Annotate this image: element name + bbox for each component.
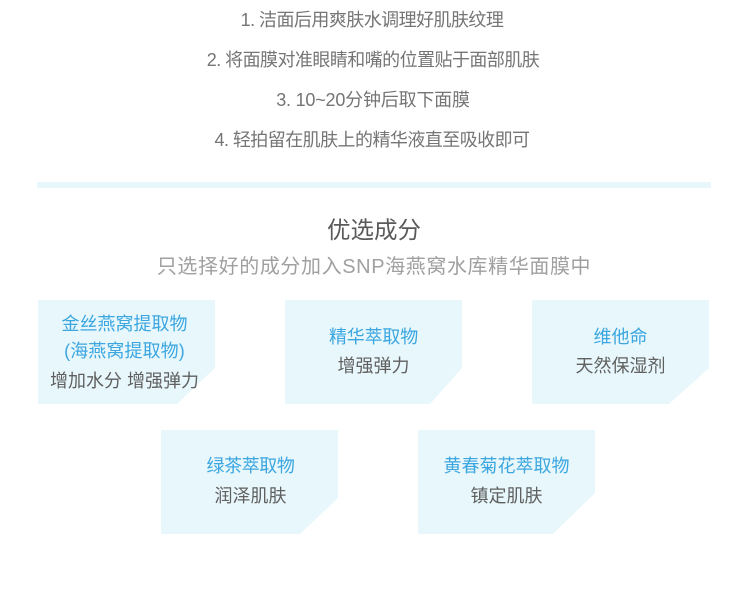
panel: chrysanthemum extract bbox=[418, 430, 595, 534]
step 2: 2. 将面膜对准眼睛和嘴的位置贴于面部肌肤 bbox=[207, 50, 539, 70]
ingredient name: 黄春菊花萃取物 bbox=[444, 456, 570, 476]
ingredient benefit: 天然保湿剂 bbox=[576, 356, 666, 376]
ingredient name: 精华萃取物 bbox=[329, 327, 418, 347]
ingredient benefit: 润泽肌肤 bbox=[214, 486, 286, 506]
ingredient name: 金丝燕窝提取物 bbox=[62, 314, 188, 334]
ingredient name: 维他命 bbox=[594, 327, 648, 347]
heading: 优选成分 bbox=[327, 217, 421, 243]
ingredient benefit: 增加水分 增强弹力 bbox=[50, 371, 199, 391]
subheading: 只选择好的成分加入SNP海燕窝水库精华面膜中 bbox=[157, 256, 591, 278]
step 3: 3. 10~20分钟后取下面膜 bbox=[276, 90, 470, 110]
panel: essence extract bbox=[285, 300, 462, 404]
divider band bbox=[37, 182, 711, 188]
panel: gold silk bird's nest extract bbox=[38, 300, 215, 404]
ingredient benefit: 增强弹力 bbox=[338, 356, 410, 376]
panel: green tea extract bbox=[161, 430, 338, 534]
ingredient alternate name: (海燕窝提取物) bbox=[64, 341, 185, 361]
ingredient name: 绿茶萃取物 bbox=[206, 456, 294, 476]
panel: vitamin bbox=[532, 300, 709, 404]
step 4: 4. 轻拍留在肌肤上的精华液直至吸收即可 bbox=[214, 130, 530, 150]
step 1: 1. 洁面后用爽肤水调理好肌肤纹理 bbox=[241, 10, 503, 30]
ingredient benefit: 镇定肌肤 bbox=[470, 486, 542, 506]
